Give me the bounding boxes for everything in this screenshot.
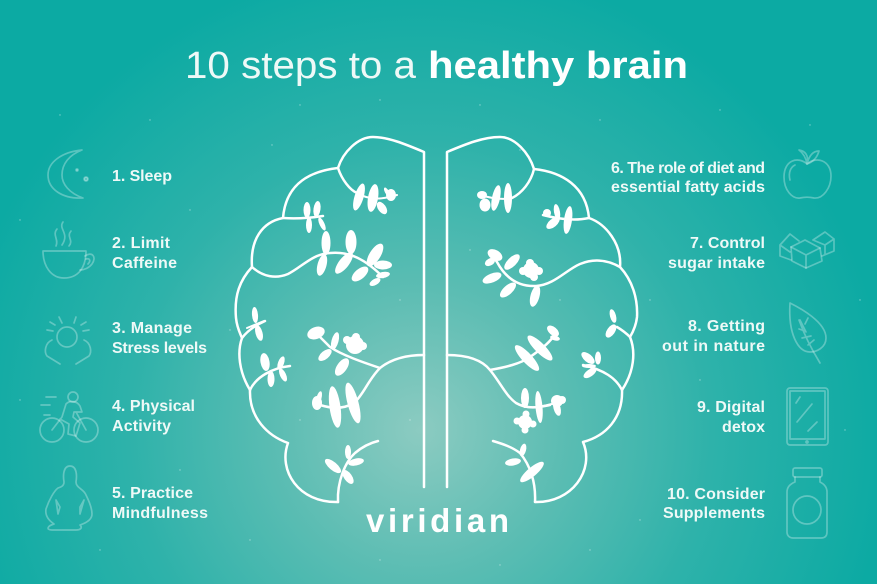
logo: viridian: viridian: [366, 502, 509, 539]
step 1: sleep: [48, 150, 172, 198]
icon: cyclist: [40, 392, 98, 442]
label: [112, 320, 207, 357]
icon: coffee cup: [43, 222, 94, 278]
label: [112, 398, 195, 435]
step 7: sugar: [668, 232, 834, 272]
label: out in nature: [662, 338, 765, 355]
label: sugar intake: [668, 255, 765, 272]
label: [663, 486, 765, 522]
step 2: caffeine: [43, 222, 177, 278]
icon: leaf: [790, 303, 826, 363]
label: [611, 160, 765, 196]
icon: tablet: [787, 388, 828, 445]
label: detox: [722, 419, 765, 436]
label: 1. Sleep: [112, 168, 172, 185]
label: 5. Practice: [112, 485, 193, 502]
label: [112, 235, 177, 272]
icon: hands and sun: [45, 317, 91, 364]
label: 7. Control: [690, 235, 765, 252]
icon: apple: [784, 150, 831, 198]
step 5: mindfulness: [46, 466, 208, 530]
label: [112, 485, 208, 522]
label: Supplements: [663, 505, 765, 522]
label: 9. Digital: [697, 399, 765, 416]
label: [662, 318, 765, 355]
icon: moon: [48, 150, 88, 198]
label: 6. The role of diet and: [611, 160, 765, 177]
label: 8. Getting: [688, 318, 765, 335]
label: Activity: [112, 418, 171, 435]
title: 10 steps to a: [185, 45, 417, 87]
step 10: supplements: [663, 468, 827, 538]
label: 4. Physical: [112, 398, 195, 415]
label: [668, 235, 765, 272]
left hemisphere outline: [236, 137, 424, 502]
right hemisphere outline: [447, 137, 637, 502]
left sprigs: [247, 182, 397, 486]
label: Caffeine: [112, 255, 177, 272]
label: [697, 399, 765, 436]
brain illustration: [236, 137, 637, 502]
label: essential fatty acids: [611, 179, 765, 196]
icon: sugar cubes: [780, 232, 834, 268]
right sprigs: [477, 183, 619, 485]
step 9: digital detox: [697, 388, 828, 445]
label: 3. Manage: [112, 320, 192, 337]
icon: meditating figure: [46, 466, 92, 530]
label: 2. Limit: [112, 235, 171, 252]
label: Mindfulness: [112, 505, 208, 522]
title: [185, 45, 688, 87]
label: 10. Consider: [667, 486, 765, 503]
title: healthy brain: [428, 45, 688, 87]
label: Stress levels: [112, 340, 207, 357]
step 3: stress: [45, 317, 207, 364]
step 4: activity: [40, 392, 195, 442]
icon: supplement jar: [787, 468, 827, 538]
step 8: nature: [662, 303, 826, 363]
step 6: diet: [611, 150, 831, 198]
